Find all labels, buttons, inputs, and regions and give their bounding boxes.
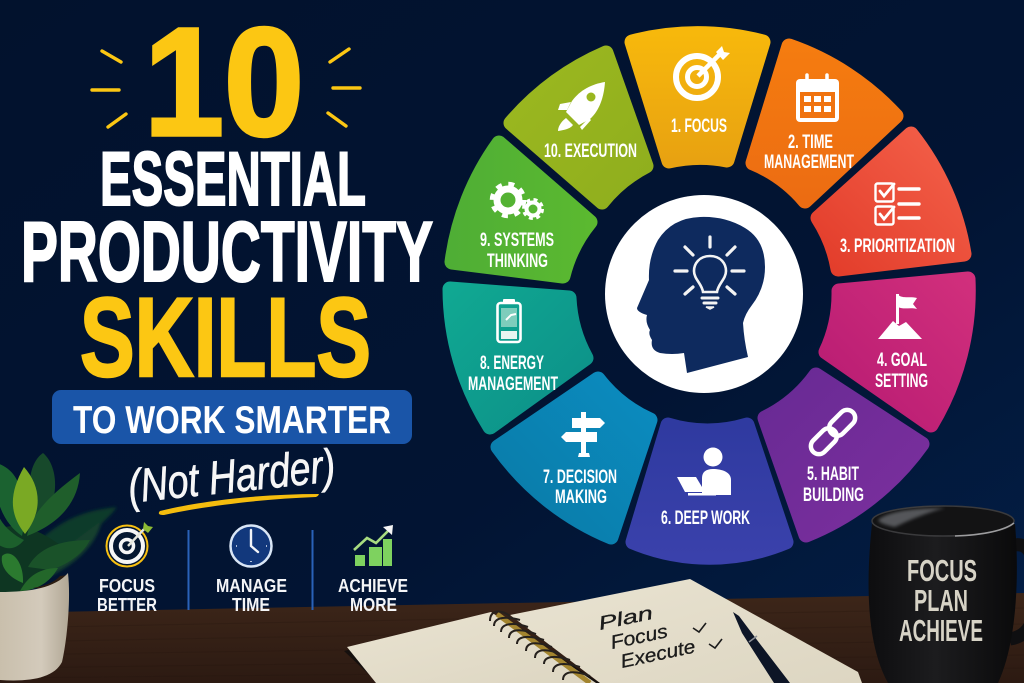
soil (33, 575, 68, 590)
label: focus better (97, 576, 157, 615)
icon: head silhouette (637, 217, 765, 373)
segment 7: decision making: 7. DECISION (543, 467, 617, 488)
sparkle rays (92, 49, 360, 127)
segment 6: deep work (633, 425, 786, 557)
label: manage time: MANAGE (216, 576, 287, 596)
icon: person at laptop (677, 448, 731, 496)
coffee mug (869, 506, 1024, 683)
leaf: lower front (20, 568, 58, 591)
leaf: top right (30, 453, 55, 518)
icon: signpost (561, 412, 605, 457)
icon: checklist (876, 184, 919, 224)
segment 5: habit building: BUILDING (803, 485, 864, 506)
label: manage time: TIME (232, 595, 270, 615)
wheel of skills (450, 34, 968, 557)
icon: growth chart (354, 525, 393, 566)
segment 4: goal setting: 4. GOAL (877, 350, 927, 371)
divider (188, 530, 190, 610)
banner: to work smarter: TO WORK SMARTER (73, 399, 391, 442)
left page (347, 612, 596, 683)
icon: clock (230, 526, 272, 566)
label: achieve more (338, 576, 408, 615)
segment 9: systems thinking: 9. SYSTEMS (480, 230, 554, 251)
segment 5: habit building (765, 375, 922, 535)
banner: to work smarter (52, 390, 412, 444)
checkmarks (693, 623, 722, 648)
spiral binding (490, 612, 590, 683)
handwritten list: Plan (597, 603, 655, 635)
blurred background leaves (30, 507, 117, 585)
segment 9: systems thinking: THINKING (487, 251, 548, 272)
right page (510, 579, 862, 683)
number 10: 10 (144, 0, 304, 168)
notebook (344, 579, 862, 683)
mug body (869, 524, 1017, 683)
leaf: bright center (13, 467, 38, 534)
segment 2: time management (753, 46, 896, 201)
icon: rocket (558, 82, 605, 131)
segment 7: decision making: MAKING (555, 487, 607, 508)
segment 3: prioritization (818, 134, 964, 269)
icon: flag on mountain (878, 294, 922, 339)
leaf: round lower left (2, 554, 23, 583)
notebook cover shadow (344, 614, 600, 683)
mug text: FOCUS (907, 553, 977, 588)
icon: light bulb (675, 237, 744, 309)
wooden desk (0, 593, 1024, 683)
icon: calendar (796, 75, 839, 122)
plant (0, 453, 117, 680)
mug rim highlight (955, 523, 1014, 536)
leaf: left lower (0, 495, 24, 548)
yellow underline (159, 494, 319, 515)
segment 8: energy management (450, 289, 586, 427)
icon: gears (492, 184, 542, 218)
title (21, 0, 433, 400)
heading line: skills: SKILLS (80, 275, 371, 400)
dark foliage mass (0, 526, 60, 592)
mug handle (1010, 545, 1024, 639)
segment 4: goal setting (826, 279, 968, 425)
icon: chain link (808, 407, 858, 457)
center hub (605, 195, 803, 393)
segment 1: focus (632, 34, 763, 161)
label: focus better: FOCUS (99, 576, 155, 596)
segment 2: time management: MANAGEMENT (764, 152, 854, 173)
segment 4: goal setting: SETTING (875, 371, 928, 392)
handwritten list: Execute (619, 637, 697, 673)
label: manage time (216, 576, 287, 615)
segment 8: energy management: 8. ENERGY (480, 353, 544, 374)
heading line: productivity: PRODUCTIVITY (21, 205, 433, 300)
icon: target (676, 46, 730, 98)
mug text (899, 553, 983, 648)
pot (0, 573, 69, 680)
segment 9: systems thinking (452, 143, 590, 276)
segment 2: time management: 2. TIME (788, 132, 833, 153)
leaf: wide right (28, 540, 90, 570)
segment 6: deep work: 6. DEEP WORK (661, 508, 750, 529)
handwritten subtitle: (Not Harder) (125, 438, 338, 513)
icon: battery (498, 299, 520, 342)
leaf: right (27, 473, 80, 536)
mug inner highlight (878, 508, 945, 527)
benefits row (97, 522, 408, 615)
segment 1: focus: 1. FOCUS (671, 116, 727, 137)
handwritten list (597, 603, 697, 673)
icon: target (106, 522, 153, 566)
mug rim (872, 506, 1014, 536)
label: achieve more: MORE (350, 595, 397, 615)
heading line: essential: ESSENTIAL (100, 137, 366, 222)
handwritten list: Focus (609, 621, 670, 654)
segment 7: decision making (498, 379, 650, 537)
divider (312, 530, 314, 610)
label: achieve more: ACHIEVE (338, 576, 408, 596)
segment 8: energy management: MANAGEMENT (468, 374, 558, 395)
segment 3: prioritization: 3. PRIORITIZATION (840, 236, 955, 257)
segment 10: execution (511, 53, 646, 202)
leaf: upper left (0, 462, 24, 536)
mug text: PLAN (914, 583, 968, 618)
segment 10: execution: 10. EXECUTION (544, 141, 637, 162)
label: focus better: BETTER (97, 595, 157, 615)
pen (733, 612, 790, 683)
segment 5: habit building: 5. HABIT (807, 464, 859, 485)
